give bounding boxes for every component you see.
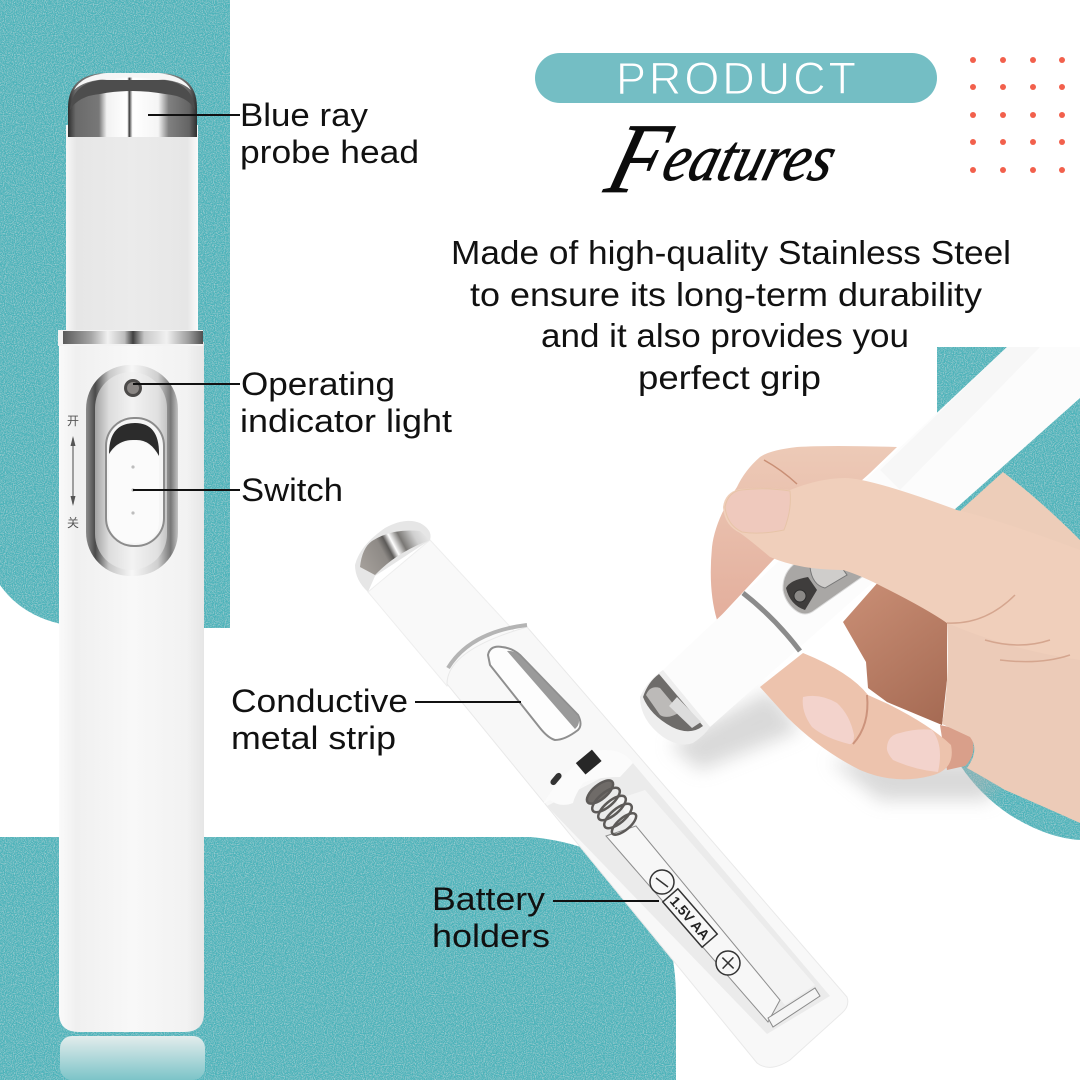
fingernail: middle — [803, 696, 854, 744]
indicator light — [124, 379, 142, 397]
description text: Made of high-quality Stainless Steel — [451, 234, 1011, 271]
switch slot — [106, 418, 164, 546]
right hand holding pen — [640, 347, 1080, 823]
held pen body — [705, 347, 1080, 727]
teal background: top left — [0, 0, 230, 628]
title pill: PRODUCT: PRODUCT — [616, 53, 856, 104]
description text: perfect grip — [638, 359, 821, 396]
battery strip — [606, 826, 780, 1022]
description text — [451, 234, 1011, 396]
heading: Features: F — [595, 104, 683, 215]
plus mark — [716, 951, 740, 975]
cap — [543, 750, 633, 805]
on and off marks — [67, 414, 79, 530]
on and off marks: 关 — [67, 516, 79, 530]
description text: to ensure its long-term durability — [470, 276, 983, 313]
metal strip — [488, 647, 580, 740]
contact block — [576, 750, 602, 775]
thumb nail — [725, 489, 790, 533]
callout: operating indicator light: indicator light — [240, 403, 452, 439]
heading: Features: eatures — [655, 121, 845, 195]
callout: battery holders: Battery — [432, 881, 545, 917]
left pen: full product — [58, 73, 205, 1080]
description text: and it also provides you — [541, 317, 909, 354]
small contact — [549, 772, 563, 786]
on and off marks: 开 — [67, 414, 79, 428]
pen upper body — [66, 125, 198, 333]
compartment ribs — [615, 790, 815, 1005]
pen lower body — [59, 342, 204, 1032]
battery label: 1.5V AA — [667, 893, 713, 943]
thumb — [723, 478, 1080, 662]
lower body — [447, 627, 848, 1067]
held pen switch window — [782, 564, 862, 614]
teal background: right — [937, 347, 1080, 840]
held pen far shading — [1000, 347, 1007, 354]
battery compartment — [547, 762, 830, 1034]
probe head — [355, 521, 431, 592]
switch panel — [86, 365, 178, 576]
wrist and palm — [942, 622, 1080, 823]
callout: operating indicator light — [133, 366, 452, 439]
pen silver ring — [58, 330, 203, 346]
palm interior — [843, 580, 947, 725]
back of hand behind pen — [960, 472, 1080, 550]
palm creases — [947, 595, 1070, 662]
ring — [448, 625, 527, 668]
pinky tip — [940, 725, 973, 770]
callout: operating indicator light: Operating — [241, 366, 395, 402]
held pen ring — [743, 593, 800, 651]
callout: blue ray probe head: probe head — [240, 134, 419, 170]
callout: blue ray probe head — [148, 97, 419, 170]
callout: battery holders: holders — [432, 918, 550, 954]
callout: conductive metal strip — [231, 683, 521, 756]
callout: switch: Switch — [241, 472, 343, 508]
callout: blue ray probe head: Blue ray — [240, 97, 368, 133]
minus mark — [650, 870, 674, 894]
curled fingers — [760, 653, 952, 779]
pen reflection — [60, 1036, 205, 1080]
decorative dot grid — [970, 57, 1065, 173]
index finger — [711, 446, 897, 620]
callout: conductive metal strip: Conductive — [231, 683, 408, 719]
end contact — [768, 988, 820, 1027]
fingernail: ring — [887, 729, 940, 772]
callout: battery holders — [432, 881, 659, 954]
spring — [583, 776, 639, 838]
switch slider — [109, 441, 159, 543]
pen and hand shadow — [670, 690, 1000, 800]
upper body — [368, 540, 515, 686]
middle pen: opened battery compartment — [355, 521, 848, 1067]
pen probe head — [68, 73, 197, 137]
teal background: bottom left — [0, 837, 676, 1080]
held pen tip — [640, 670, 710, 745]
title pill: PRODUCT — [535, 53, 937, 104]
callout: conductive metal strip: metal strip — [231, 720, 396, 756]
